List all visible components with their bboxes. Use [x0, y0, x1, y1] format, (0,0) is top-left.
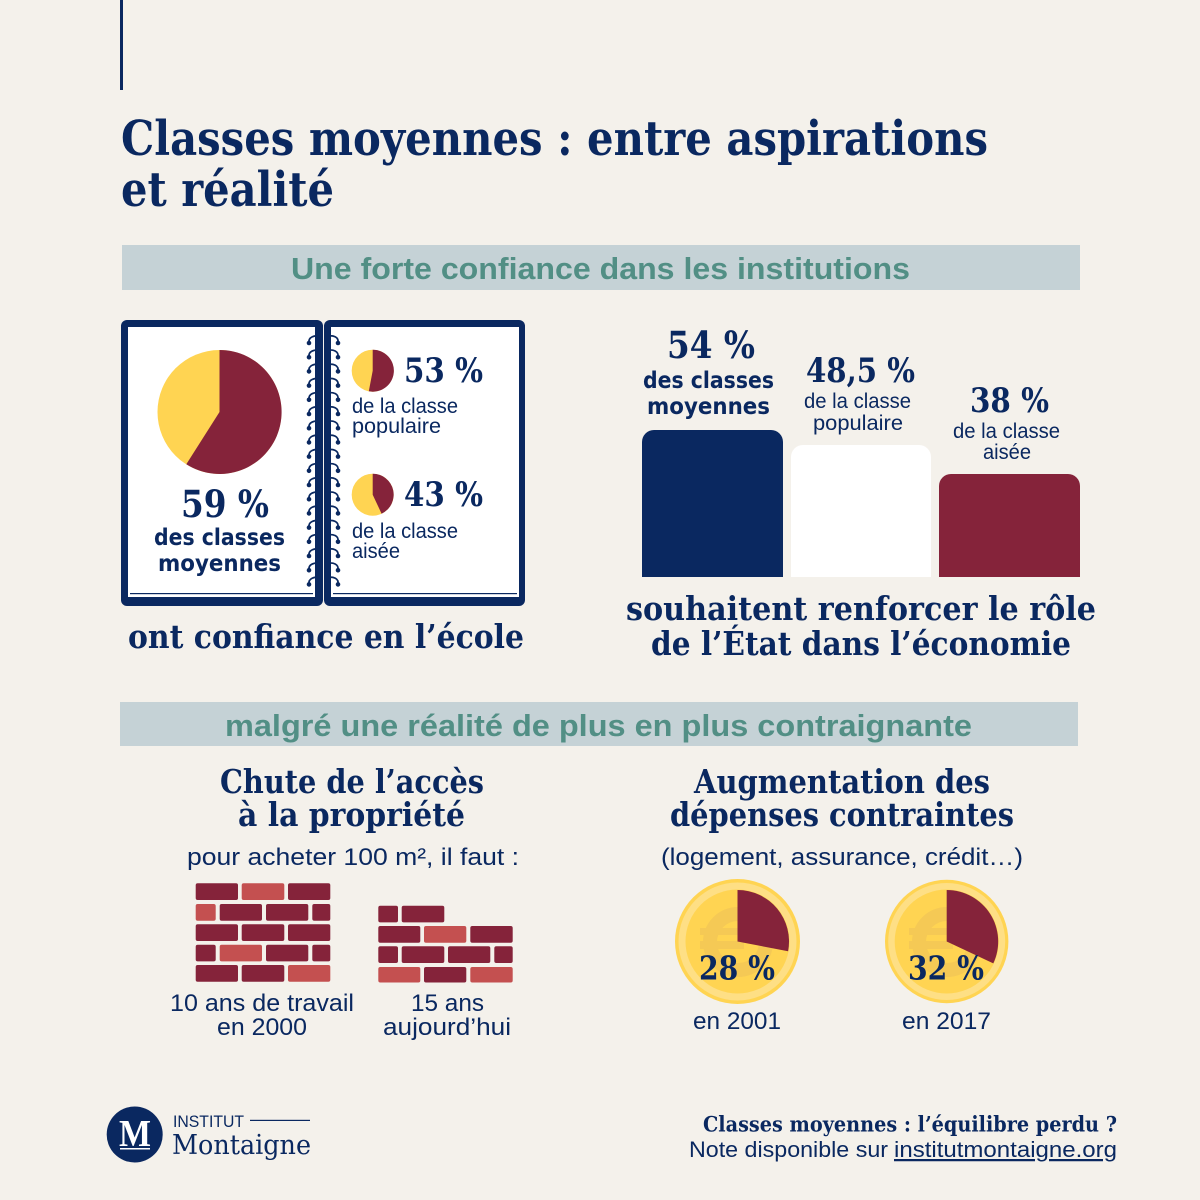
logo: Institut Montaigne [107, 1106, 311, 1162]
stat: 59 % des classes moyennes: 59 % [181, 482, 269, 526]
bar: classe populaire 48,5 % [791, 351, 931, 577]
icon: coin 32 % [885, 880, 1008, 1003]
bar: classes moyennes 54 %: des classes [643, 368, 774, 394]
icon: coin 28 % [675, 879, 800, 1004]
label: 15 ans aujourd'hui [383, 990, 511, 1041]
logo: Institut Montaigne: Montaigne [172, 1130, 311, 1161]
bar: classe aisée 38 %: aisée [983, 441, 1031, 464]
icon: coin 32 %: 32 % [908, 948, 984, 988]
icon: brick wall 2000 [196, 883, 330, 982]
logo: Institut Montaigne: M [119, 1113, 151, 1155]
pie chart: 53 % [352, 350, 394, 392]
stat: 43 % classe aisée: de la classe [352, 520, 458, 543]
icon: coin 28 %: 28 % [699, 948, 775, 988]
stat: 59 % des classes moyennes: moyennes [158, 551, 281, 577]
notebook left page [121, 320, 323, 606]
footer: note reference: Classes moyennes : l’équilibre perdu ? [703, 1112, 1117, 1136]
label: 10 ans de travail en 2000: en 2000 [217, 1014, 307, 1041]
panel: notebook school confidence [121, 320, 525, 606]
pie chart: 59 % [158, 350, 282, 474]
bar: classes moyennes 54 %: 54 % [667, 323, 755, 367]
stat: 59 % des classes moyennes [154, 482, 285, 577]
bar: classe aisée 38 %: de la classe [953, 420, 1060, 443]
label: 15 ans aujourd'hui: 15 ans [411, 990, 484, 1017]
footer: note reference: Note disponible sur [689, 1137, 889, 1162]
stat: 43 % classe aisée: 43 % [404, 475, 483, 514]
caption: renforcer le rôle de l'État: souhaitent renforcer le rôle [626, 589, 1096, 628]
subheading: pour acheter 100 m²: pour acheter 100 m², il faut : [187, 844, 519, 871]
heading: chute de l'accès à la propriété [220, 762, 484, 834]
title: et réalité [121, 162, 334, 218]
section banner: réalité contraignante: malgré une réalité de plus en plus contraignante [225, 708, 972, 743]
heading: chute de l'accès à la propriété: à la propriété [238, 795, 465, 834]
caption: renforcer le rôle de l'État [626, 589, 1096, 663]
stat: 53 % classe populaire: de la classe [352, 395, 458, 418]
bar: classe aisée 38 % [939, 381, 1080, 577]
stat: 53 % classe populaire: 53 % [404, 351, 483, 390]
label: 10 ans de travail en 2000: 10 ans de travail [170, 990, 354, 1017]
stat: 43 % classe aisée [352, 475, 483, 563]
label: en 2017: en 2017 [902, 1008, 991, 1035]
bar: classe populaire 48,5 %: populaire [813, 412, 903, 435]
bar: classes moyennes 54 % [642, 323, 783, 577]
panel: dépenses contraintes [661, 762, 1023, 1035]
stat: 59 % des classes moyennes: des classes [154, 525, 285, 551]
section banner: institutions: Une forte confiance dans les institutions [291, 251, 910, 286]
label: en 2001: en 2001 [693, 1008, 781, 1035]
bar: classe populaire 48,5 %: 48,5 % [806, 351, 915, 390]
bar: classe aisée 38 %: 38 % [970, 381, 1049, 420]
stat: 53 % classe populaire: populaire [352, 415, 441, 438]
footer: note reference: institutmontaigne.org [894, 1137, 1117, 1162]
notebook spiral binding [307, 336, 340, 587]
logo: Institut Montaigne: INSTITUT [173, 1112, 244, 1131]
heading: augmentation des dépenses contraintes [670, 762, 1014, 834]
section banner: réalité contraignante [120, 702, 1078, 746]
caption: renforcer le rôle de l'État: de l’État dans l’économie [651, 623, 1071, 663]
heading: augmentation des dépenses contraintes: Augmentation des [693, 762, 990, 801]
top accent line [120, 0, 123, 90]
bar: classe populaire 48,5 %: de la classe [804, 390, 911, 413]
pie chart: 43 % [352, 474, 394, 516]
section banner: institutions [122, 245, 1080, 290]
footer: note reference [689, 1112, 1117, 1162]
label: 15 ans aujourd'hui: aujourd’hui [383, 1014, 511, 1041]
subheading: logement, assurance, crédit: (logement, assurance, crédit…) [661, 844, 1023, 871]
bar: classes moyennes 54 %: moyennes [647, 394, 770, 420]
stat: 43 % classe aisée: aisée [352, 540, 400, 563]
bar chart: role of the state [642, 323, 1080, 577]
label: 10 ans de travail en 2000 [170, 990, 354, 1041]
heading: augmentation des dépenses contraintes: dépenses contraintes [670, 795, 1014, 834]
icon: brick wall today [378, 906, 513, 982]
stat: 53 % classe populaire [352, 351, 483, 438]
title: Classes moyennes : entre aspirations [121, 111, 988, 167]
notebook right page [324, 320, 525, 606]
heading: chute de l'accès à la propriété: Chute de l’accès [220, 762, 484, 801]
caption: ont confiance en l'école: ont confiance en l’école [128, 617, 524, 656]
panel: accès à la propriété [170, 762, 519, 1041]
title [121, 111, 988, 218]
